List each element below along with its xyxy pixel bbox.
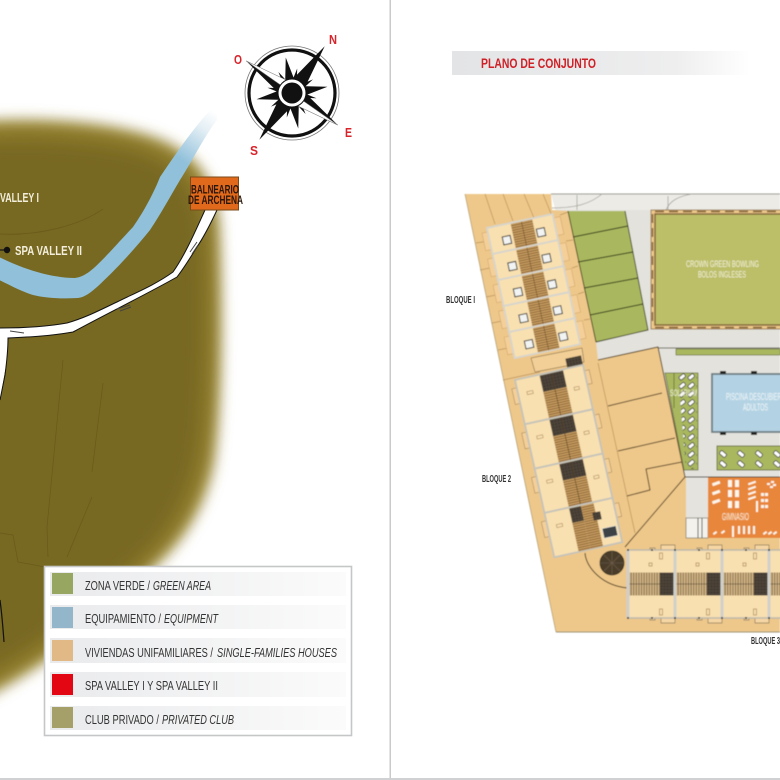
- road: [0, 210, 217, 400]
- faint map tracks: [0, 209, 103, 567]
- legend row: private club: PRIVATED CLUB: [162, 712, 234, 727]
- compass letter N: N: [329, 32, 337, 47]
- round plaza: [585, 551, 628, 588]
- solarium: SOLARIUM: [670, 388, 697, 399]
- marker: Balneario de Archena: DE ARCHENA: [188, 195, 243, 207]
- map area: private club land: [0, 120, 221, 705]
- marker: Spa Valley II: SPA VALLEY II: [15, 244, 82, 258]
- label: Bloque 2: BLOQUE 2: [482, 474, 511, 485]
- link pavilion: [531, 348, 584, 372]
- plan access road: [551, 194, 780, 210]
- housing block 1: [481, 213, 587, 359]
- icon: compass rose: [242, 42, 342, 144]
- bowling green: [651, 210, 780, 329]
- garden lot lines: [476, 194, 635, 533]
- legend row: Spa Valley: [50, 672, 346, 697]
- legend row: equipment: EQUIPMENT: [164, 611, 219, 626]
- site plan: [465, 194, 780, 632]
- gymnasium: GIMNASIO: [722, 512, 749, 523]
- marker: Spa Valley II: [0, 244, 82, 258]
- marker: Balneario de Archena: BALNEARIO: [191, 184, 239, 196]
- plan grey paving: [551, 194, 780, 477]
- compass letter E: E: [345, 125, 352, 140]
- wedge parcel lines: [598, 347, 685, 547]
- legend row: houses: [50, 638, 346, 663]
- legend row: green area: [50, 572, 346, 596]
- green strip: [658, 348, 780, 355]
- compass letter O: O: [234, 52, 242, 67]
- legend row: equipment: EQUIPAMIENTO /: [85, 611, 161, 626]
- road markings: [10, 242, 198, 333]
- legend row: equipment: [50, 605, 346, 629]
- green plots: [568, 211, 648, 342]
- side road edge: [0, 600, 4, 642]
- housing block 2: [510, 364, 627, 558]
- legend row: private club: [50, 706, 346, 730]
- label: Bloque 1: BLOQUE I: [446, 295, 475, 306]
- heading band: Plano de conjunto: PLANO DE CONJUNTO: [481, 56, 596, 71]
- panel: legend: [44, 566, 352, 736]
- swimming pool: [712, 371, 780, 435]
- housing block 3: [626, 545, 780, 623]
- legend row: private club: CLUB PRIVADO /: [85, 712, 159, 727]
- gymnasium: [685, 477, 780, 538]
- legend row: Spa Valley: SPA VALLEY I Y SPA VALLEY II: [85, 678, 218, 693]
- compass letter S: S: [250, 143, 258, 158]
- legend row: houses: SINGLE-FAMILIES HOUSES: [217, 645, 337, 660]
- gym service room: [686, 477, 708, 538]
- label: Spa Valley I: VALLEY I: [0, 191, 39, 205]
- solarium: [665, 373, 698, 470]
- legend row: green area: GREEN AREA: [153, 578, 211, 593]
- river: [0, 103, 217, 298]
- legend row: houses: VIVIENDAS UNIFAMILIARES /: [85, 645, 213, 660]
- legend row: green area: ZONA VERDE /: [85, 578, 150, 593]
- panel: location map: [0, 103, 243, 705]
- heading band: Plano de conjunto: [452, 51, 750, 75]
- marker: Balneario de Archena: [188, 177, 243, 210]
- poolside loungers: [717, 446, 780, 470]
- bowling green: BOLOS INGLESES: [698, 270, 746, 280]
- plan tan plot: [465, 194, 780, 632]
